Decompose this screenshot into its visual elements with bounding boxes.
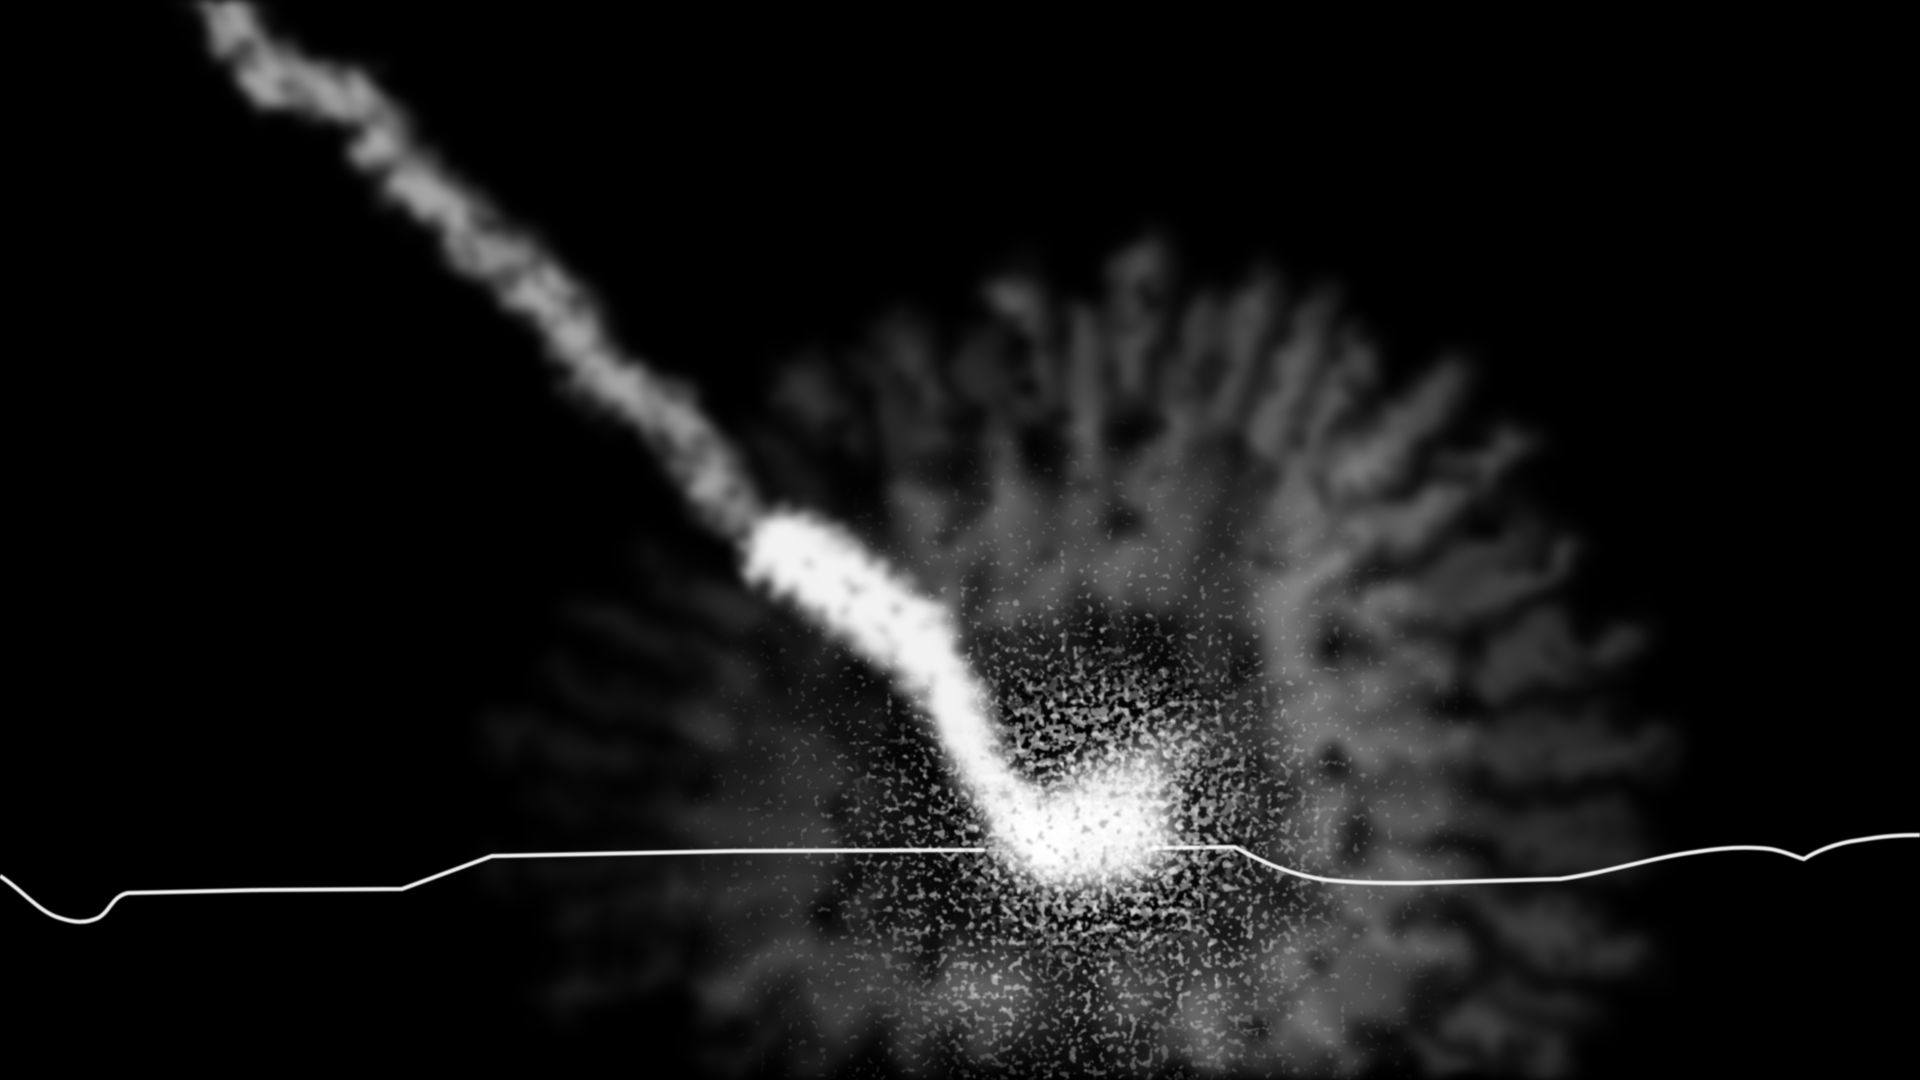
impact core dark mottling [960, 677, 1228, 962]
trail: bright section descending into the core [785, 550, 1050, 850]
seismic line [0, 835, 1920, 922]
dense particle field around the impact [832, 602, 1350, 1080]
radial blurred streaks of the explosion [486, 221, 1691, 1080]
sparse particle field [690, 447, 1474, 1080]
trail: dim smoke plume from the top left [205, 0, 730, 505]
dark radial gaps below the core [871, 920, 1175, 1064]
impact core speckle [935, 651, 1265, 980]
impact core glow [993, 708, 1213, 888]
